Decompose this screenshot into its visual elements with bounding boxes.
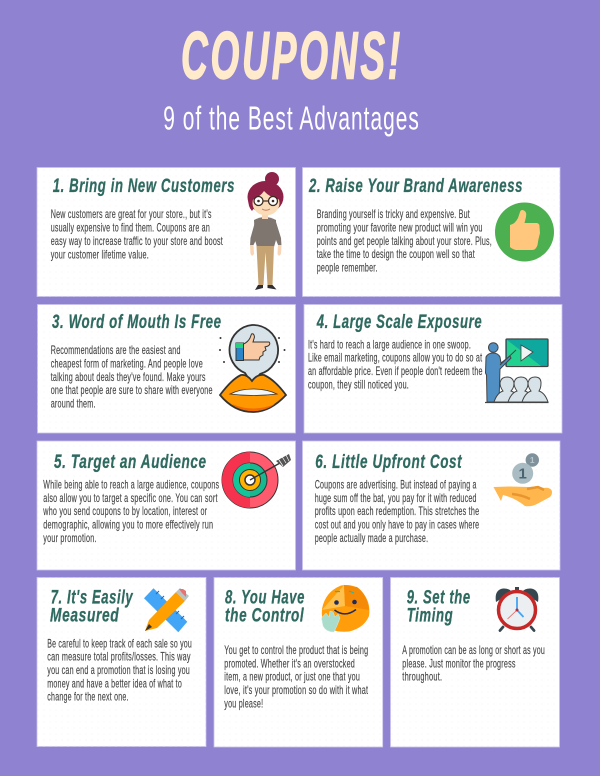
text block: you can end a promotion that is losing you (47, 664, 190, 677)
icon: hand with coins: 1 (530, 455, 535, 465)
heading: 6. Little Upfront Cost (315, 451, 463, 473)
icon: smiling emoji with hand (322, 585, 369, 632)
heading: Measured (50, 605, 119, 627)
text block: one that people are sure to share with everyone (51, 384, 213, 397)
heading (225, 586, 305, 627)
text block (43, 478, 219, 545)
text block: usually expensive to find them. Coupons are an (51, 222, 210, 234)
text block: cost out and you only have to pay in cases where (315, 518, 479, 532)
text block: please. Just monitor the progress (402, 657, 516, 670)
text block: you please! (224, 697, 263, 710)
heading: 5. Target an Audience (54, 451, 207, 473)
text block: While being able to reach a large audience, coupons (43, 478, 219, 491)
text block: coupon, they still noticed you. (308, 378, 409, 392)
text block: Recommendations are the easiest and (51, 344, 181, 357)
icon: hand with coins: 1 (519, 466, 527, 482)
panel: 1. Bring in New Customers (37, 168, 296, 296)
heading (50, 586, 133, 627)
heading: 9. Set the (407, 586, 471, 608)
text block: Like email marketing, coupons allow you to do so at (308, 352, 483, 365)
heading: Timing (407, 605, 453, 627)
text block: people actually made a purchase. (315, 532, 428, 545)
text block: promoting your favorite new product will win you (317, 222, 483, 234)
panel: 9. Set the Timing (390, 578, 560, 747)
text block: change for the next one. (47, 691, 129, 704)
text block: also allow you to target a specific one. You can sort (43, 492, 218, 505)
heading: 1. Bring in New Customers (53, 175, 235, 197)
heading (407, 586, 471, 627)
text block (224, 644, 369, 710)
text block: an affordable price. Even if people don't redeem the (308, 365, 483, 378)
text block: love, it's your promotion so do with it what (224, 684, 369, 697)
text block (47, 637, 192, 704)
icon: thumbs up badge (495, 202, 554, 262)
text block: take the time to design the coupon well so that (317, 248, 475, 261)
text block: people remember. (317, 262, 378, 274)
heading: 3. Word of Mouth Is Free (52, 311, 222, 333)
text block: You get to control the product that is being (224, 644, 368, 657)
text block: money and have a better idea of what to (47, 677, 182, 690)
text block: your customer lifetime value. (51, 248, 149, 261)
text block: huge sum off the bat, you pay for it with reduced (315, 492, 477, 505)
heading: 8. You Have (225, 586, 305, 608)
text block: item, a new product, or just one that you (224, 671, 360, 684)
text block (51, 344, 213, 410)
text block (51, 208, 223, 261)
icon: presenter with screen and audience (485, 339, 548, 402)
panel: 6. Little Upfront Cost (302, 441, 560, 570)
text block: profits upon each redemption. This stretches the (315, 505, 479, 518)
text block: demographic, allowing you to more effectively run (43, 518, 213, 532)
text block: Coupons are advertising. But instead of paying a (315, 478, 477, 491)
text block: promoted. Whether it's an overstocked (224, 657, 355, 670)
text block: your promotion. (43, 532, 97, 545)
panel: 4. Large Scale Exposure (304, 304, 562, 433)
icon: hand with coins (494, 453, 552, 506)
panel: 5. Target an Audience (37, 441, 296, 570)
text block (402, 644, 545, 684)
icon: target with arrow (222, 452, 291, 508)
panel: 2. Raise Your Brand Awareness (302, 168, 560, 296)
text block: who you send coupons to by location, interest or (43, 505, 207, 518)
title: COUPONS! (181, 20, 403, 94)
text block (308, 338, 483, 392)
text block: cheapest form of marketing. And people love (51, 358, 203, 370)
panel: 8. You Have the Control (214, 578, 383, 747)
panel: 3. Word of Mouth Is Free (38, 304, 296, 433)
text block: throughout. (402, 671, 442, 684)
icon: lips with thumbs up speech bubble (219, 325, 286, 412)
icon: alarm clock (496, 587, 538, 630)
text block: It's hard to reach a large audience in one swoop. (308, 338, 471, 351)
text block: around them. (51, 398, 96, 410)
panel: 7. It's Easily Measured (37, 578, 206, 746)
text block: Be careful to keep track of each sale so you (47, 637, 192, 650)
text block: points and get people talking about your store. Plus, (317, 235, 492, 248)
subtitle: 9 of the Best Advantages (163, 100, 420, 137)
text block: talking about deals they've found. Make yours (51, 371, 206, 384)
heading: the Control (225, 605, 304, 627)
text block: easy way to increase traffic to your store and boost (51, 235, 223, 248)
icon: woman with glasses (248, 172, 284, 290)
text block: New customers are great for your store., but it's (51, 208, 212, 221)
heading: 7. It's Easily (51, 586, 133, 608)
text block (315, 478, 479, 545)
text block: Branding yourself is tricky and expensive. But (317, 208, 470, 221)
heading: 4. Large Scale Exposure (316, 311, 482, 333)
text block (317, 208, 492, 274)
icon: ruler and pencil (144, 588, 189, 632)
text block: can measure total profits/losses. This way (47, 651, 191, 664)
